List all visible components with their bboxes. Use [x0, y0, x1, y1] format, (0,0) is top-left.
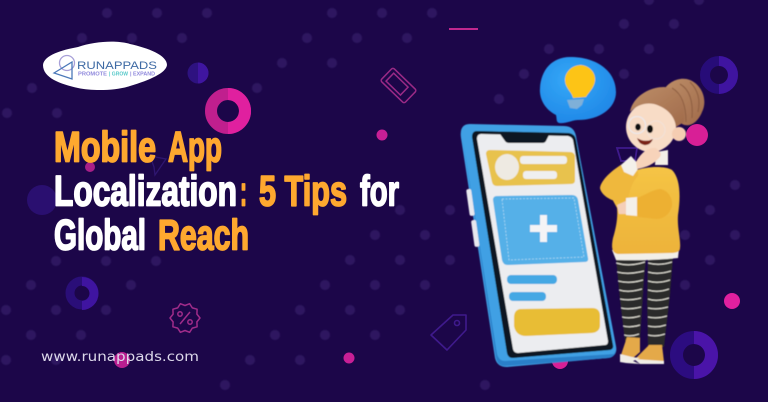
title line 2: for: [360, 168, 399, 216]
phone side buttons: [466, 189, 480, 247]
illustration: phone: [461, 124, 616, 367]
logo wordmark: RUNAPPADS: [77, 60, 157, 72]
title line 2: 5 Tips: [259, 168, 347, 216]
avatar oval: [495, 154, 519, 180]
bulb base: [567, 99, 584, 109]
sweater torso: [610, 167, 680, 254]
decorative shape: top right donut: [705, 56, 738, 94]
glasses: [628, 116, 665, 139]
bulb: [565, 65, 595, 98]
logo tagline: | GROW: [109, 72, 128, 78]
legs: [616, 257, 673, 347]
sweater hem: [612, 249, 679, 260]
logo tagline: | EXPAND: [130, 72, 155, 78]
plus icon: [530, 215, 557, 242]
icon: faint cart outline: [617, 148, 637, 161]
decorative shape: purple circle left: [27, 185, 57, 215]
logo badge: [43, 42, 167, 90]
title: [54, 124, 399, 260]
cuffs: [621, 156, 640, 216]
phone notch: [500, 134, 549, 143]
title line 1: App: [168, 124, 222, 172]
title line 3: [54, 212, 249, 260]
logo tagline: PROMOTE: [78, 72, 108, 78]
phone screen: [477, 134, 608, 353]
blue card: [493, 195, 588, 265]
hair: [630, 87, 684, 127]
decorative shape: pink donut: [211, 88, 251, 134]
decorative dots: magenta: [85, 124, 740, 369]
icon: phone outline: [380, 68, 417, 103]
head: [626, 102, 676, 152]
logo icon: [54, 56, 74, 79]
decorative dash: top: [449, 28, 478, 30]
bubble: [540, 57, 616, 123]
decorative shape: purple half circle: [188, 62, 208, 84]
card lines: [520, 156, 567, 164]
collar: [655, 150, 668, 165]
mouth: [637, 138, 653, 145]
ear: [672, 127, 686, 141]
logo tagline: [78, 72, 155, 78]
website url: www.runappads.com: [41, 350, 199, 365]
title line 3: Global: [54, 212, 146, 260]
illustration: character: [600, 79, 704, 364]
icon: percent badge: [170, 304, 200, 332]
decorative shape: bottom right donut: [676, 331, 718, 379]
eyes: [635, 124, 653, 133]
illustration: speech bubble with light bulb: [540, 57, 616, 123]
yellow card: [486, 150, 575, 186]
yellow button: [514, 308, 600, 336]
shoes: [620, 337, 664, 364]
sweater arm: [600, 163, 638, 202]
title line 2: :: [240, 168, 247, 216]
title line 3: Reach: [158, 212, 249, 260]
title line 1: Mobile: [54, 124, 156, 172]
forearm: [635, 189, 672, 219]
lower hand: [617, 201, 626, 214]
phone bezel: [472, 131, 613, 358]
decorative shape: left donut: [70, 277, 98, 310]
logo background: [43, 42, 167, 90]
phone body: [461, 124, 616, 367]
blue bars: [507, 275, 557, 301]
leg stripes: [616, 262, 672, 336]
upper hand: [636, 148, 661, 169]
icon: faint arrow outline: [150, 156, 166, 175]
icon: price tag: [431, 315, 466, 350]
hair bun: [664, 79, 704, 125]
title line 2: Localization: [54, 168, 237, 216]
